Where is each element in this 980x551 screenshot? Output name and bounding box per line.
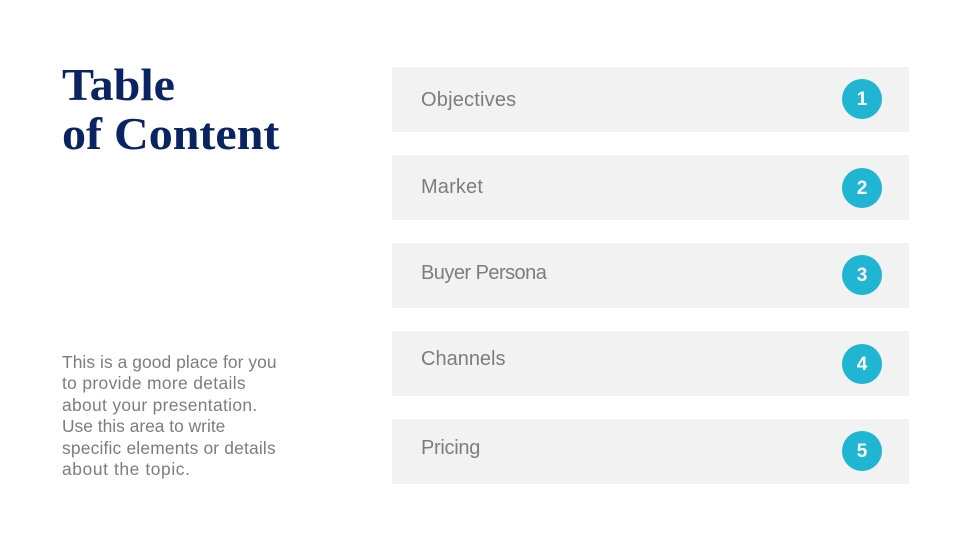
description text block [62, 352, 277, 479]
label: Pricing: Pricing [421, 437, 480, 459]
badge: number 4: 4 [857, 354, 867, 375]
badge: number 4 [842, 344, 882, 384]
badge: number 2: 2 [857, 178, 867, 199]
label: Buyer Persona: Buyer Persona [421, 262, 546, 284]
title: Table [62, 59, 175, 110]
badge: number 3 [842, 255, 882, 295]
panel: Objectives row [392, 67, 909, 132]
panel: Pricing row [392, 419, 909, 484]
description text block: Use this area to write [62, 416, 225, 436]
panel: Market row [392, 155, 909, 220]
badge: number 2 [842, 168, 882, 208]
description text block: specific elements or details [62, 438, 276, 458]
label: Objectives: Objectives [421, 89, 516, 111]
title: of Content [62, 108, 279, 159]
badge: number 1 [842, 79, 882, 119]
badge: number 3: 3 [857, 265, 867, 286]
label: Channels: Channels [421, 348, 506, 370]
description text block: about the topic. [62, 459, 191, 479]
description text block: to provide more details [62, 373, 246, 393]
label: Market: Market [421, 176, 483, 198]
badge: number 1: 1 [857, 89, 867, 110]
panel: Channels row [392, 331, 909, 396]
badge: number 5 [842, 431, 882, 471]
panel: Buyer Persona row [392, 243, 909, 308]
title [62, 59, 280, 159]
badge: number 5: 5 [857, 441, 867, 462]
description text block: about your presentation. [62, 395, 257, 415]
description text block: This is a good place for you [62, 352, 277, 372]
